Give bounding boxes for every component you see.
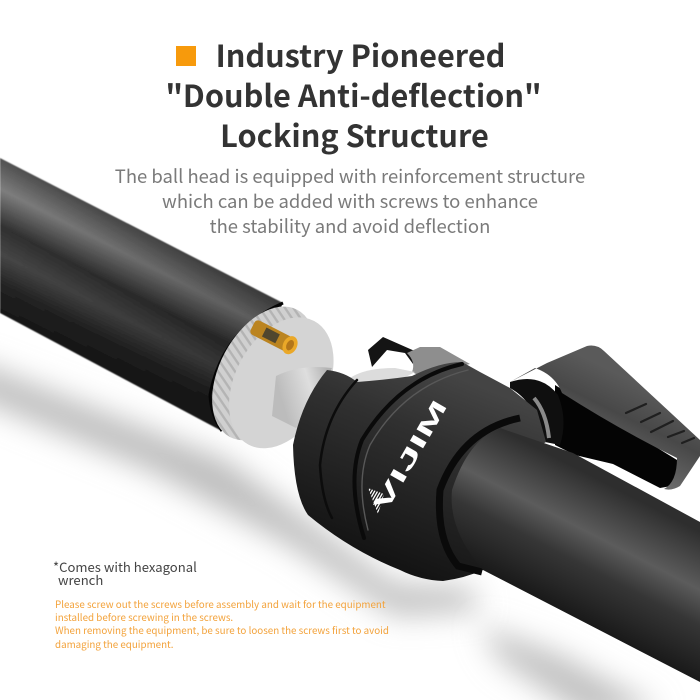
title: Locking Structure xyxy=(220,111,489,156)
subtitle xyxy=(115,163,585,239)
wrench note xyxy=(53,557,197,589)
lever grip xyxy=(510,346,700,490)
right tube xyxy=(452,428,700,682)
tube end ring xyxy=(210,303,283,431)
tube front ring xyxy=(439,418,520,572)
soft shadows xyxy=(0,360,660,700)
left tube xyxy=(0,158,283,430)
grip ridges xyxy=(626,404,694,443)
disc face xyxy=(208,299,355,466)
rear knob xyxy=(368,337,417,367)
translucent knurled disc xyxy=(191,289,356,468)
warning note xyxy=(55,597,389,651)
subtitle: The ball head is equipped with reinforcement structure xyxy=(115,163,585,189)
title: Industry Pioneered xyxy=(216,31,505,76)
collar neck xyxy=(407,347,470,376)
knurled edge xyxy=(191,289,336,458)
lever inner black xyxy=(555,385,677,488)
title: "Double Anti-deflection" xyxy=(165,71,542,116)
subtitle: which can be added with screws to enhance xyxy=(162,188,538,214)
wrench note: *Comes with hexagonal xyxy=(53,557,197,576)
logo xyxy=(368,395,452,515)
chrome ball band xyxy=(350,368,415,386)
lever handle xyxy=(510,346,700,490)
title icon: orange square xyxy=(176,46,196,66)
subtitle: the stability and avoid deflection xyxy=(210,213,490,239)
title xyxy=(165,31,542,156)
logo text: VIJIM xyxy=(369,395,452,515)
wrench note: wrench xyxy=(58,570,103,589)
warning note: When removing the equipment, be sure to loosen the screws first to avoid xyxy=(55,623,389,637)
warning note: installed before screwing in the screws. xyxy=(55,610,233,624)
collar body xyxy=(293,362,546,581)
logo hatch xyxy=(368,488,384,514)
gold screw xyxy=(248,318,301,357)
warning note: damaging the equipment. xyxy=(55,637,174,651)
warning note: Please screw out the screws before assembly and wait for the equipment xyxy=(55,597,386,611)
collar grooves xyxy=(320,364,468,538)
lever ring xyxy=(510,379,564,445)
ball stem xyxy=(272,367,332,428)
